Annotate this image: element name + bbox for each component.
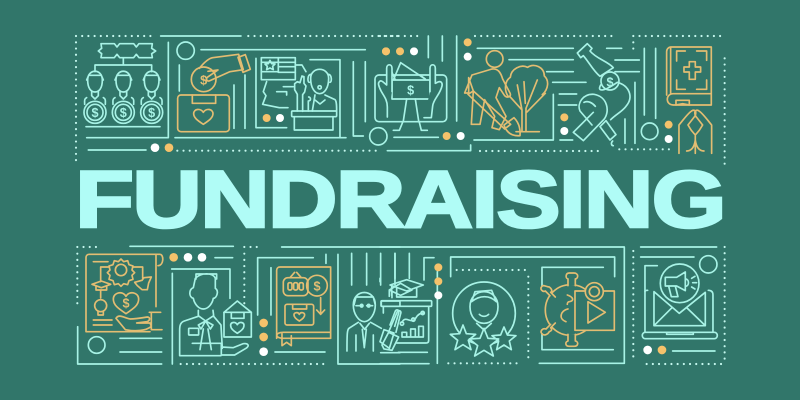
bottom left icon panel xyxy=(77,246,412,364)
icon: virus with video play window xyxy=(541,273,614,346)
icon: bottle pouring coin with awareness ribbon xyxy=(573,44,630,146)
accent dots xyxy=(151,47,390,152)
icon: hands holding money on monitor: $ xyxy=(407,83,414,97)
icon: money bill to three donors xyxy=(84,44,163,123)
icon: praying hands with roots xyxy=(679,110,712,153)
icon: holy book with cross xyxy=(667,47,711,105)
bottom right icon panel xyxy=(380,247,725,364)
decorative ring xyxy=(177,42,194,59)
icon: rated person with three stars xyxy=(450,282,516,356)
accent dots xyxy=(169,253,268,356)
icon: hands holding money on monitor xyxy=(375,63,447,130)
icon: teacher with graduation cap xyxy=(347,283,412,351)
icon: charity scroll with gear and heart xyxy=(86,254,163,332)
icon: hand dropping coin into donation box xyxy=(178,54,250,132)
icon: hand dropping coin into donation box: $ xyxy=(200,73,207,87)
decorative ring xyxy=(88,337,105,353)
icon: email and megaphone on laptop xyxy=(642,256,717,339)
accent dots xyxy=(434,263,666,354)
icon: money bill to three donors: $ xyxy=(120,106,127,120)
icon: money bill to three donors: $ xyxy=(148,106,155,120)
icon: person planting tree xyxy=(465,51,548,136)
decorative ring xyxy=(370,128,387,145)
icon: money bill to three donors: $ xyxy=(91,106,99,120)
icon: man holding house of hearts xyxy=(180,274,251,356)
icon: bottle pouring coin with awareness ribbon: $ xyxy=(606,75,614,89)
icon: charity scroll with gear and heart: $ xyxy=(122,297,130,311)
icon: book with basket and coin xyxy=(277,267,331,346)
icon: speaker at podium with flag xyxy=(261,58,337,130)
icon: presentation board with chart xyxy=(380,280,432,348)
icon: book with basket and coin: $ xyxy=(313,279,320,293)
title: FUNDRAISING xyxy=(75,153,725,244)
top right icon panel xyxy=(370,36,725,165)
top left icon panel xyxy=(76,36,400,165)
accent dots xyxy=(382,38,673,143)
decorative ring xyxy=(641,123,658,140)
